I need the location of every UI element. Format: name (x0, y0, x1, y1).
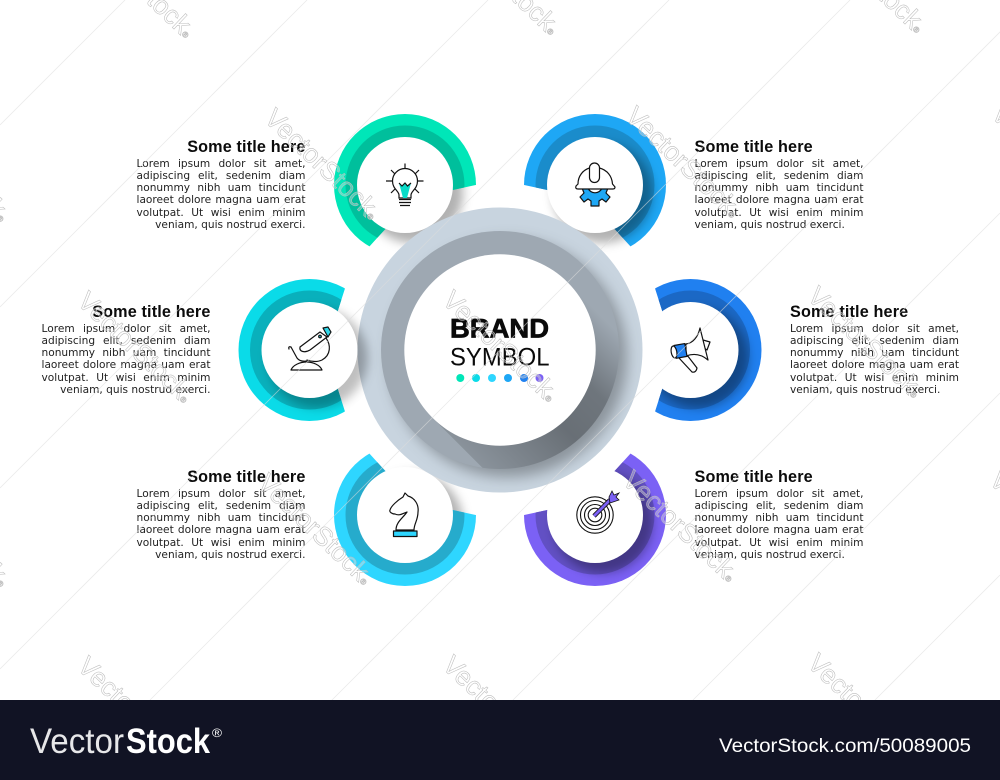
watermark: VectorStock repeated: VectorStock (72, 651, 195, 770)
watermark: VectorStock repeated: VectorStock (259, 103, 382, 222)
watermark: VectorStock repeated: VectorStock (620, 101, 743, 220)
watermark: VectorStock repeated: ® (908, 390, 918, 400)
icon: target and arrow (577, 491, 619, 533)
body text: middle right: laoreet dolore magna uam erat (790, 359, 959, 371)
heading: bottom left: Some title here (187, 468, 306, 486)
body text: bottom right: laoreet dolore magna uam erat (694, 524, 864, 536)
watermark: VectorStock repeated: VectorStock (437, 650, 560, 769)
body text: bottom left (136, 488, 306, 561)
body text: middle left: Lorem ipsum dolor sit amet, (42, 322, 210, 334)
brand wordmark (450, 313, 550, 372)
body text: top right: nonummy nibh uam tincidunt (694, 182, 864, 194)
body text: middle left (42, 322, 210, 396)
watermark: VectorStock repeated: ® (180, 30, 190, 40)
body text: bottom right (694, 488, 864, 561)
footer logo: ® (212, 726, 222, 740)
watermark: VectorStock repeated: ® (911, 25, 921, 35)
icon: light bulb (386, 164, 424, 206)
heading: top right: Some title here (694, 138, 813, 156)
body text: middle right: volutpat. Ut wisi enim minim (790, 372, 959, 384)
watermark: VectorStock repeated: VectorStock (252, 468, 375, 587)
heading: middle right: Some title here (790, 303, 908, 321)
icon: microscope (289, 327, 331, 370)
text block: bottom right (694, 468, 864, 561)
body text: top left: volutpat. Ut wisi enim minim (136, 207, 306, 219)
watermark: VectorStock repeated: ® (543, 759, 553, 769)
body text: bottom left: adipiscing elit, sedenim diam (136, 500, 306, 512)
body text: top left: laoreet dolore magna uam erat (136, 194, 306, 206)
icon: chess knight (390, 493, 418, 536)
body text: top right: laoreet dolore magna uam erat (694, 194, 864, 206)
node: top-left green ring with light bulb (334, 114, 476, 256)
watermark: VectorStock repeated: ® (723, 574, 733, 584)
watermark: VectorStock repeated: ® (726, 210, 736, 220)
body text: bottom left: volutpat. Ut wisi enim minim (136, 537, 306, 549)
body text: top left: adipiscing elit, sedenim diam (136, 170, 306, 182)
icon: helmet and gear (576, 163, 615, 206)
node: left cyan ring with microscope (238, 279, 363, 421)
brand wordmark: SYMBOL (450, 344, 550, 372)
watermark: VectorStock repeated: ® (365, 212, 375, 222)
node: right blue ring with megaphone (655, 279, 762, 421)
watermark: VectorStock repeated: VectorStock (72, 286, 195, 405)
footer image id: VectorStock.com/50089005 (719, 735, 971, 757)
body text: top left: Lorem ipsum dolor sit amet, (136, 158, 306, 170)
central brand circle (358, 208, 642, 492)
body text: middle left: veniam, quis nostrud exerci. (60, 384, 210, 396)
watermark: VectorStock repeated: ® (178, 760, 188, 770)
footer band (0, 700, 1000, 780)
body text: middle left: laoreet dolore magna uam erat (42, 359, 210, 371)
body text: middle left: volutpat. Ut wisi enim minim (42, 372, 210, 384)
footer logo (30, 722, 222, 761)
watermark: VectorStock repeated: VectorStock (802, 648, 925, 767)
heading: middle left: Some title here (92, 303, 210, 321)
footer logo: Vector (30, 722, 124, 761)
body text: top right: Lorem ipsum dolor sit amet, (694, 158, 864, 170)
watermark: VectorStock repeated: ® (545, 27, 555, 37)
body text: bottom right: adipiscing elit, sedenim diam (694, 500, 864, 512)
body text: top right: veniam, quis nostrud exerci. (694, 219, 845, 231)
body text: middle right: adipiscing elit, sedenim diam (790, 335, 959, 347)
heading: bottom right: Some title here (694, 468, 813, 486)
watermark: VectorStock repeated: ® (908, 757, 918, 767)
body text: middle right (790, 322, 959, 396)
body text: middle right: nonummy nibh uam tincidunt (790, 347, 959, 359)
six colour dots (456, 374, 544, 382)
node: top-right blue ring with helmet (524, 114, 666, 256)
body text: middle left: adipiscing elit, sedenim diam (42, 335, 210, 347)
watermark: VectorStock repeated: ® (543, 394, 553, 404)
body text: middle left: nonummy nibh uam tincidunt (42, 347, 210, 359)
brand wordmark: BRAND (450, 313, 549, 343)
node: bottom-right purple ring with target (524, 444, 666, 586)
body text: top right: adipiscing elit, sedenim diam (694, 170, 864, 182)
watermark: VectorStock repeated: VectorStock (802, 281, 925, 400)
body text: top left: nonummy nibh uam tincidunt (136, 182, 306, 194)
heading: top left: Some title here (187, 138, 306, 156)
body text: top left (136, 158, 306, 231)
watermark: VectorStock repeated: ® (178, 395, 188, 405)
node: bottom-left sky ring with chess knight (334, 444, 476, 586)
body text: bottom right: volutpat. Ut wisi enim minim (694, 537, 864, 549)
body text: top right: volutpat. Ut wisi enim minim (694, 207, 864, 219)
body text: bottom left: laoreet dolore magna uam erat (136, 524, 306, 536)
icon: megaphone (670, 328, 710, 372)
body text: bottom right: veniam, quis nostrud exerci. (694, 549, 845, 561)
body text: bottom right: nonummy nibh uam tincidunt (694, 512, 864, 524)
body text: middle right: Lorem ipsum dolor sit amet, (790, 322, 959, 334)
body text: top right (694, 158, 864, 231)
footer logo: Stock (126, 722, 210, 761)
watermark: VectorStock repeated: VectorStock (437, 285, 560, 404)
text block: middle left (42, 303, 210, 396)
text block: middle right (790, 303, 959, 396)
body text: bottom left: veniam, quis nostrud exerci. (155, 549, 306, 561)
body text: middle right: veniam, quis nostrud exerci. (790, 384, 940, 396)
text block: top right (694, 138, 864, 231)
watermark: VectorStock repeated: VectorStock (617, 465, 740, 584)
body text: bottom right: Lorem ipsum dolor sit amet, (694, 488, 864, 500)
text block: bottom left (136, 468, 306, 561)
watermark: VectorStock repeated: ® (358, 577, 368, 587)
body text: bottom left: Lorem ipsum dolor sit amet, (136, 488, 306, 500)
body text: top left: veniam, quis nostrud exerci. (155, 219, 306, 231)
body text: bottom left: nonummy nibh uam tincidunt (136, 512, 306, 524)
text block: top left (136, 138, 306, 231)
